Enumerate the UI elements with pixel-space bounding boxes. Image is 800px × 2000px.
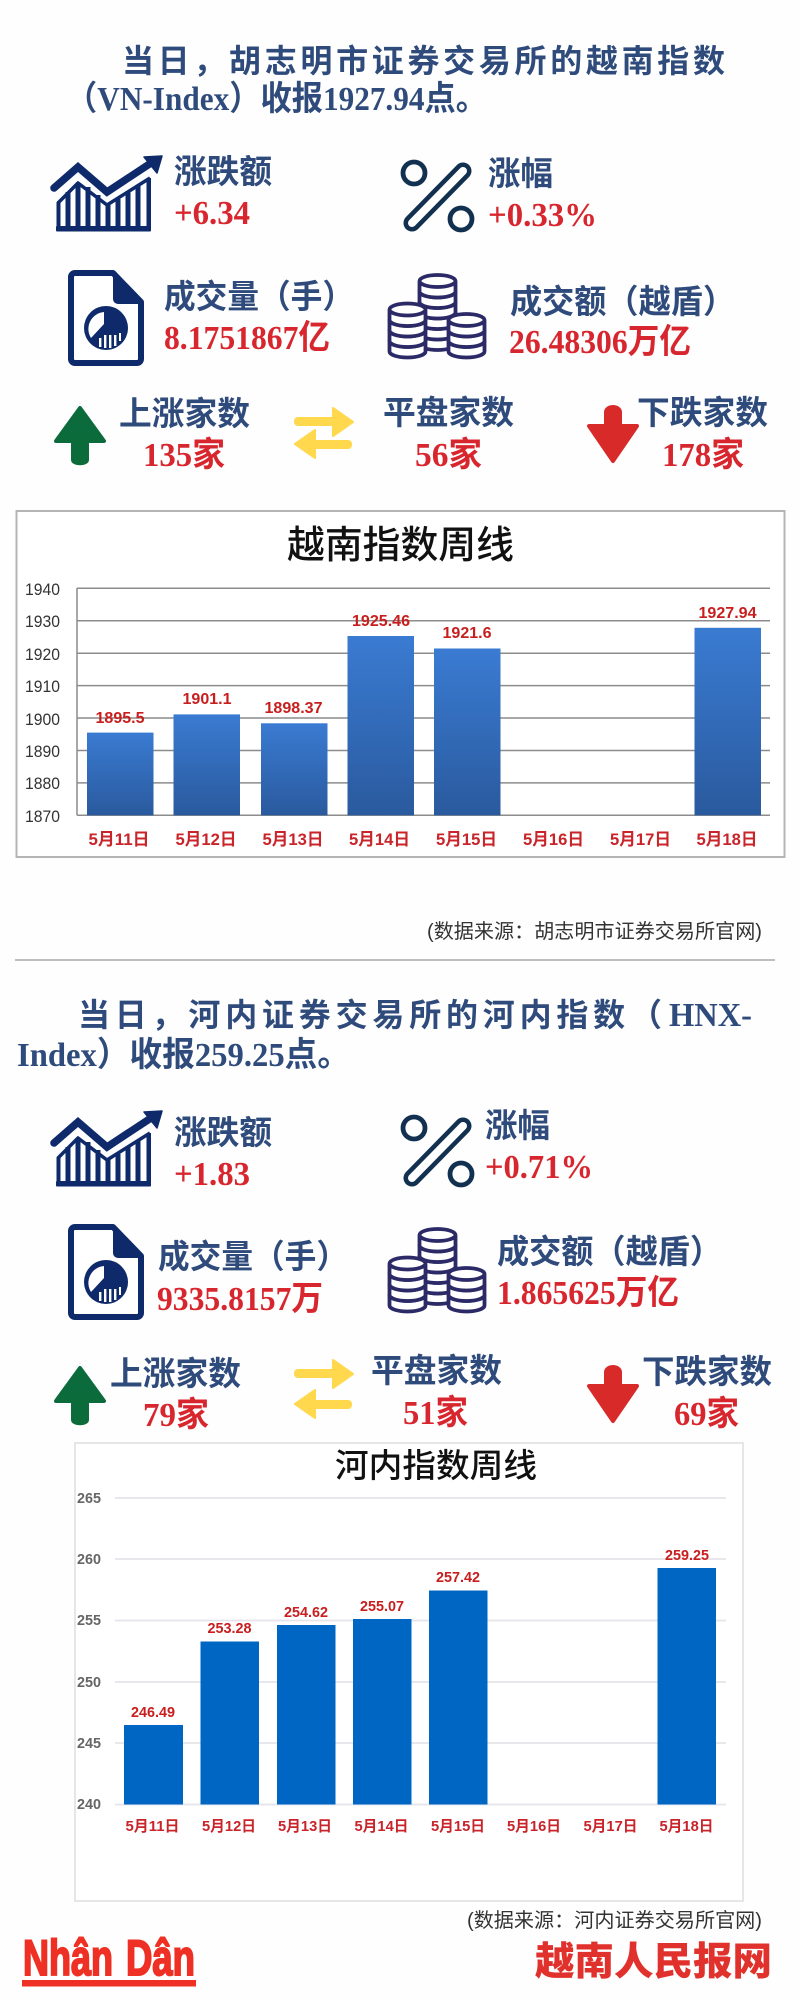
x axis labels: 5月18日 — [696, 830, 758, 849]
stat: decliners — [637, 395, 768, 474]
stat: advancers — [110, 1356, 241, 1434]
x axis labels: 5月17日 — [584, 1818, 638, 1835]
source note: (数据来源：胡志明市证券交易所官网) — [427, 920, 762, 943]
stat: change percent: 涨幅 — [485, 1108, 550, 1145]
x axis labels: 5月14日 — [354, 1818, 408, 1835]
chart: VN-Index weekly bars — [16, 511, 784, 857]
stat: unchanged: 平盘家数 — [383, 395, 514, 432]
stat: advancers: 79家 — [143, 1396, 209, 1434]
stat: unchanged — [383, 395, 514, 474]
heading: VN-Index summary — [66, 43, 725, 118]
y axis labels: 265 — [77, 1490, 101, 1507]
stat: change percent: +0.33% — [488, 197, 597, 234]
stat: change amount: 涨跌额 — [174, 154, 272, 191]
stat: change percent: +0.71% — [485, 1149, 593, 1186]
y axis labels: 1870 — [25, 807, 60, 826]
stat: unchanged: 56家 — [415, 436, 482, 474]
stat: trading value — [509, 284, 735, 361]
data labels: 254.62 — [284, 1604, 328, 1621]
heading: VN-Index summary: 当日，胡志明市证券交易所的越南指数 — [122, 43, 725, 79]
icon: swap arrows — [294, 408, 353, 458]
data labels: 257.42 — [436, 1569, 480, 1586]
x axis labels: 5月15日 — [431, 1818, 485, 1835]
x axis labels: 5月11日 — [126, 1818, 180, 1835]
y axis labels: 1910 — [25, 677, 60, 696]
y axis labels: 255 — [77, 1612, 101, 1629]
stat: change amount — [174, 1115, 272, 1193]
panel: HNX-Index section — [17, 997, 772, 1932]
x axis labels: 5月16日 — [523, 830, 584, 849]
x axis labels — [88, 830, 758, 849]
stat: decliners: 178家 — [662, 436, 744, 474]
data labels: 255.07 — [360, 1598, 404, 1615]
source note: (数据来源：河内证券交易所官网) — [467, 1909, 762, 1932]
chart title: 越南指数周线 — [287, 525, 514, 567]
stat: trading value: 26.48306万亿 — [509, 323, 691, 361]
x axis labels: 5月13日 — [262, 830, 324, 849]
stat: trading volume: 成交量（手） — [158, 1239, 348, 1276]
stat: trading volume: 成交量（手） — [164, 279, 354, 316]
logo: Nhan Dan: Dân — [126, 1930, 195, 1986]
bars — [124, 1568, 716, 1804]
stat: trading value: 成交额（越盾） — [497, 1234, 722, 1271]
panel: VN-Index section — [16, 43, 784, 943]
icon: rising line chart — [54, 156, 162, 232]
data labels: 1925.46 — [352, 613, 410, 630]
x axis labels: 5月18日 — [660, 1818, 714, 1835]
data labels: 1901.1 — [182, 691, 232, 708]
stat: unchanged — [371, 1353, 502, 1432]
stat: change amount: +1.83 — [174, 1156, 250, 1193]
logo: Nhan Dan: Nhân — [23, 1930, 113, 1986]
heading: HNX-Index summary: Index）收报259.25点。 — [17, 1036, 350, 1074]
stat: unchanged: 平盘家数 — [371, 1353, 502, 1390]
y axis labels: 1920 — [25, 645, 60, 664]
y axis labels: 1930 — [25, 612, 60, 631]
stat: trading volume — [157, 1239, 348, 1318]
data labels — [96, 605, 757, 727]
stat: change percent: 涨幅 — [488, 156, 553, 193]
stat: trading value — [497, 1234, 722, 1312]
icon: up arrow — [56, 1368, 104, 1423]
data labels: 1927.94 — [698, 605, 757, 622]
heading: VN-Index summary: （VN-Index）收报1927.94点。 — [66, 80, 487, 118]
icon: percent — [403, 162, 472, 230]
stat: trading volume: 9335.8157万 — [157, 1281, 323, 1318]
y axis labels: 1890 — [25, 742, 60, 761]
x axis labels: 5月14日 — [349, 830, 410, 849]
y axis labels — [25, 580, 60, 826]
x axis labels: 5月16日 — [507, 1818, 561, 1835]
site name: 越南人民报网 — [535, 1931, 772, 1987]
heading: HNX-Index summary: 当日，河内证券交易所的河内指数（ — [78, 997, 662, 1033]
stat: decliners: 下跌家数 — [637, 395, 768, 432]
data labels: 1895.5 — [96, 710, 145, 727]
data labels: 253.28 — [208, 1620, 252, 1637]
data labels — [131, 1547, 709, 1721]
y axis labels: 240 — [77, 1796, 101, 1813]
chart title: 河内指数周线 — [335, 1447, 537, 1484]
stat: trading volume: 8.1751867亿 — [164, 319, 330, 357]
heading: HNX-Index summary — [17, 997, 752, 1074]
x axis labels: 5月11日 — [88, 830, 150, 849]
x axis labels: 5月13日 — [278, 1818, 332, 1835]
icon: coin stacks — [390, 1229, 484, 1312]
stat: trading value: 成交额（越盾） — [510, 284, 735, 321]
data labels: 259.25 — [665, 1547, 709, 1564]
stat: advancers — [119, 396, 250, 474]
data labels: 246.49 — [131, 1704, 175, 1721]
y axis labels: 250 — [77, 1674, 101, 1691]
y axis labels: 1940 — [25, 580, 60, 599]
icon: down arrow — [589, 1367, 637, 1421]
icon: document with pie chart — [71, 1226, 144, 1317]
stat: change amount: 涨跌额 — [174, 1115, 272, 1152]
x axis labels: 5月12日 — [202, 1818, 256, 1835]
chart: HNX-Index weekly bars — [75, 1443, 743, 1901]
heading: HNX-Index summary: HNX- — [669, 997, 752, 1034]
x axis labels: 5月15日 — [436, 830, 497, 849]
icon: document with pie chart — [71, 272, 144, 363]
stat: advancers: 上涨家数 — [119, 396, 250, 433]
data labels: 1898.37 — [264, 700, 323, 717]
y axis labels: 260 — [77, 1551, 101, 1568]
x axis labels — [126, 1818, 714, 1835]
icon: coin stacks — [390, 275, 484, 358]
x axis labels: 5月12日 — [176, 830, 236, 849]
stat: trading value: 1.865625万亿 — [497, 1274, 679, 1312]
x axis labels: 5月17日 — [610, 830, 671, 849]
y axis labels: 1900 — [25, 710, 60, 729]
stat: change percent — [485, 1108, 593, 1186]
stat: change amount — [174, 154, 272, 232]
stat: decliners: 69家 — [674, 1395, 739, 1433]
icon: rising line chart — [54, 1111, 162, 1186]
icon: percent — [403, 1117, 472, 1185]
stat: advancers: 上涨家数 — [110, 1356, 241, 1393]
stat: change percent — [488, 156, 597, 234]
stat: unchanged: 51家 — [403, 1394, 468, 1432]
bars — [87, 628, 761, 815]
y axis labels — [77, 1490, 101, 1813]
icon: up arrow — [56, 408, 104, 463]
stat: advancers: 135家 — [143, 436, 225, 474]
stat: decliners: 下跌家数 — [642, 1354, 772, 1391]
y axis labels: 245 — [77, 1735, 101, 1752]
stat: decliners — [642, 1354, 772, 1433]
y axis labels: 1880 — [25, 774, 60, 793]
icon: down arrow — [589, 407, 637, 461]
data labels: 1921.6 — [442, 625, 492, 642]
stat: trading volume — [164, 279, 354, 357]
stat: change amount: +6.34 — [174, 195, 250, 232]
icon: swap arrows — [294, 1360, 353, 1418]
